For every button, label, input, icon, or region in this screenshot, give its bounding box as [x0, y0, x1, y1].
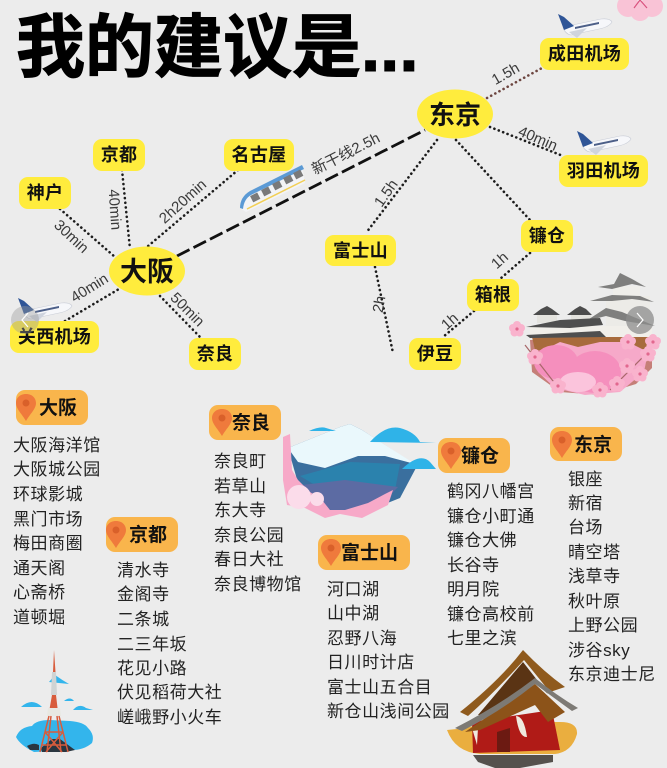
route: Osaka to Tokyo shinkansen	[177, 130, 425, 256]
time label: shinkansen: 新干线2.5h	[309, 130, 383, 178]
tag and list: Osaka: 大阪海洋馆	[13, 436, 101, 455]
time label: Haneda: 40min	[516, 123, 560, 155]
node: Nagoya	[224, 139, 294, 171]
illustration: Mount Fuji	[283, 424, 436, 518]
node: Nara: 奈良	[197, 343, 233, 364]
time label: Kyoto: 40min	[105, 189, 124, 231]
tag and list: Fuji: 日川时计店	[327, 653, 415, 672]
tag and list: Fuji: 富士山五合目	[327, 678, 432, 697]
tag and list: Tokyo	[550, 427, 656, 684]
tag and list: Nara: 春日大社	[214, 550, 284, 569]
tag and list: Osaka: 大阪	[39, 397, 77, 419]
icon: nav arrow left	[11, 306, 39, 334]
icon: cherry blossom corner	[617, 0, 663, 21]
icon: nav arrow right	[626, 306, 654, 334]
node: Osaka	[109, 246, 185, 296]
tag and list: Kyoto	[106, 517, 222, 727]
tag and list: Kamakura: 鹤冈八幡宫	[447, 482, 535, 501]
tag and list: Fuji: 新仓山浅间公园	[327, 702, 450, 721]
tag and list: Kamakura: 长谷寺	[447, 556, 500, 575]
node: Tokyo: 东京	[429, 100, 481, 130]
tag and list: Tokyo: 涉谷sky	[568, 641, 630, 660]
tag and list: Nara	[209, 405, 302, 594]
tag and list: Osaka: 通天阁	[13, 559, 66, 578]
time label: Hakone: 1h	[488, 249, 512, 273]
tag and list: Fuji: 山中湖	[327, 604, 380, 623]
tag and list: Kyoto: 二条城	[117, 610, 170, 629]
node: Fuji	[325, 235, 396, 266]
tag and list: Kyoto: 伏见稻荷大社	[117, 683, 222, 702]
icon: shinkansen train	[240, 165, 305, 212]
node: Kobe	[19, 177, 71, 209]
illustration: Sensoji temple	[447, 650, 578, 768]
tag and list: Nara: 东大寺	[214, 501, 267, 520]
tag and list: Osaka	[13, 390, 101, 627]
tag and list: Kyoto: 金阁寺	[117, 585, 170, 604]
illustration: Himeji castle	[509, 273, 661, 398]
tag and list: Kamakura: 镰仓高校前	[447, 605, 535, 624]
tag and list: Osaka: 道顿堀	[13, 608, 66, 627]
route: Hakone to Izu	[443, 311, 474, 337]
route: Osaka to Kyoto	[122, 170, 130, 249]
tag and list: Osaka: 大阪城公园	[13, 460, 101, 479]
tag and list: Osaka: 梅田商圈	[13, 534, 83, 553]
tag and list: Tokyo: 东京迪士尼	[568, 665, 656, 684]
tag and list: Kyoto: 清水寺	[117, 561, 170, 580]
node: Narita: 成田机场	[548, 43, 621, 64]
node: Kamakura	[521, 220, 573, 252]
tag and list: Kyoto: 嵯峨野小火车	[117, 708, 222, 727]
node: Osaka: 大阪	[120, 257, 174, 287]
node: Izu	[409, 338, 461, 370]
time label: Narita: 1.5h	[489, 59, 523, 89]
node: Kansai airport	[10, 321, 99, 353]
route: Tokyo to Fuji	[366, 140, 437, 233]
route: Tokyo to Haneda	[490, 127, 563, 156]
node: Nara	[189, 338, 241, 370]
node: Haneda	[559, 155, 648, 187]
tag and list: Kyoto: 二三年坂	[117, 635, 187, 654]
route: Tokyo to Narita	[487, 68, 542, 98]
tag and list: Tokyo: 东京	[574, 433, 612, 456]
tag and list: Kamakura: 镰仓大佛	[447, 531, 517, 550]
tag and list: Kyoto: 花见小路	[117, 659, 187, 678]
tag and list: Nara: 奈良	[232, 411, 270, 434]
tag and list: Kyoto: 京都	[129, 523, 167, 546]
title: 我的建议是...	[16, 9, 419, 86]
tag and list: Fuji	[318, 535, 450, 721]
illustration: Tokyo tower	[16, 650, 93, 752]
route map	[10, 38, 648, 370]
route: Osaka to Nara	[160, 296, 200, 337]
tag and list: Tokyo: 秋叶原	[568, 592, 621, 611]
node: Kobe: 神户	[27, 182, 63, 203]
tag and list: Tokyo: 上野公园	[568, 616, 638, 635]
tag and list: Tokyo: 浅草寺	[568, 567, 621, 586]
time label: Nara: 50min	[167, 289, 208, 330]
time label: Nagoya: 2h20min	[156, 176, 210, 227]
tag and list: Osaka: 黑门市场	[13, 510, 83, 529]
route: Osaka to Nagoya	[147, 170, 238, 247]
tag and list: Tokyo: 银座	[568, 470, 603, 489]
tag and list: Fuji: 富士山	[341, 541, 398, 564]
tag and list: Nara: 若草山	[214, 477, 267, 496]
tag and list: Nara: 奈良公园	[214, 526, 284, 545]
node: Fuji: 富士山	[333, 240, 388, 261]
time label: Kansai: 40min	[68, 270, 111, 306]
tag and list: Kamakura: 明月院	[447, 580, 500, 599]
time label: Fuji: 1.5h	[371, 177, 402, 210]
tag and list: Tokyo: 晴空塔	[568, 543, 621, 562]
tag and list: Tokyo: 台场	[568, 518, 603, 537]
tag and list: Kamakura: 镰仓	[461, 445, 499, 467]
node: Kyoto	[93, 139, 145, 171]
route: Fuji to Izu	[375, 267, 393, 353]
icon: plane Haneda	[577, 131, 631, 155]
time label: Izu from Fuji: 2h	[370, 295, 389, 314]
icon: plane Kansai	[18, 298, 72, 322]
tag and list: Kamakura: 镰仓小町通	[447, 507, 535, 526]
node: Kamakura: 镰仓	[529, 225, 565, 246]
icon: plane Narita	[558, 14, 612, 38]
node: Kansai airport: 关西机场	[18, 327, 91, 347]
node: Tokyo	[417, 90, 493, 138]
route: Osaka to Kansai airport	[65, 289, 119, 321]
tag and list: Osaka: 心斋桥	[13, 583, 66, 602]
node: Izu: 伊豆	[417, 344, 453, 364]
tag and list: Fuji: 忍野八海	[327, 629, 397, 648]
route: Osaka to Kobe	[60, 209, 115, 257]
tag and list: Kamakura	[438, 438, 535, 648]
node: Narita	[540, 38, 629, 70]
node: Hakone: 箱根	[475, 285, 511, 305]
tag and list: Tokyo: 新宿	[568, 494, 603, 513]
route: Tokyo to Kamakura	[456, 140, 530, 220]
time label: Izu: 1h	[438, 310, 462, 334]
time label: Kobe: 30min	[50, 217, 92, 257]
route: Kamakura to Hakone	[500, 253, 530, 279]
tag and list: Nara: 奈良博物馆	[214, 575, 302, 594]
node: Hakone	[467, 279, 519, 311]
tag and list: Nara: 奈良町	[214, 452, 267, 471]
node: Haneda: 羽田机场	[567, 161, 640, 181]
tag and list: Fuji: 河口湖	[327, 580, 380, 599]
tag and list: Kamakura: 七里之滨	[447, 629, 517, 648]
tag and list: Osaka: 环球影城	[13, 485, 83, 504]
node: Nagoya: 名古屋	[232, 145, 286, 165]
node: Kyoto: 京都	[101, 144, 137, 165]
